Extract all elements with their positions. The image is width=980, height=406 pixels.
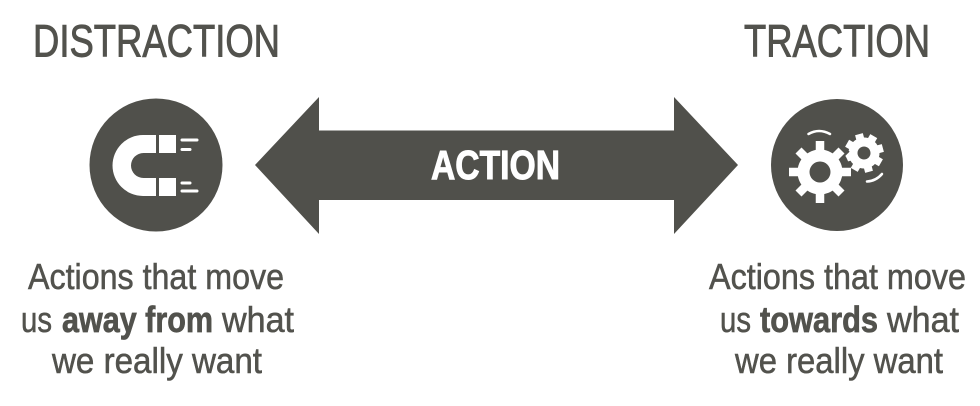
text block: distraction description: we really want xyxy=(51,340,262,381)
text block: traction description xyxy=(709,256,966,381)
text block: distraction description: what xyxy=(221,299,294,340)
text block: distraction description: Actions that move xyxy=(28,256,284,297)
text block: traction description: towards xyxy=(760,299,878,340)
text block: traction description: we really want xyxy=(734,340,943,381)
heading: traction: TRACTION xyxy=(744,16,930,66)
text block: distraction description: us xyxy=(21,299,52,340)
heading: distraction: DISTRACTION xyxy=(33,16,280,66)
arrow label: ACTION xyxy=(431,142,560,188)
text block: distraction description: away from xyxy=(62,299,213,340)
text block: traction description: what xyxy=(886,299,959,340)
icon: gears in circle xyxy=(771,99,903,231)
text block: traction description: us xyxy=(720,299,751,340)
icon: magnet in circle xyxy=(90,98,222,232)
arrow: double-headed action arrow xyxy=(255,97,738,234)
text block: distraction description xyxy=(21,256,294,381)
